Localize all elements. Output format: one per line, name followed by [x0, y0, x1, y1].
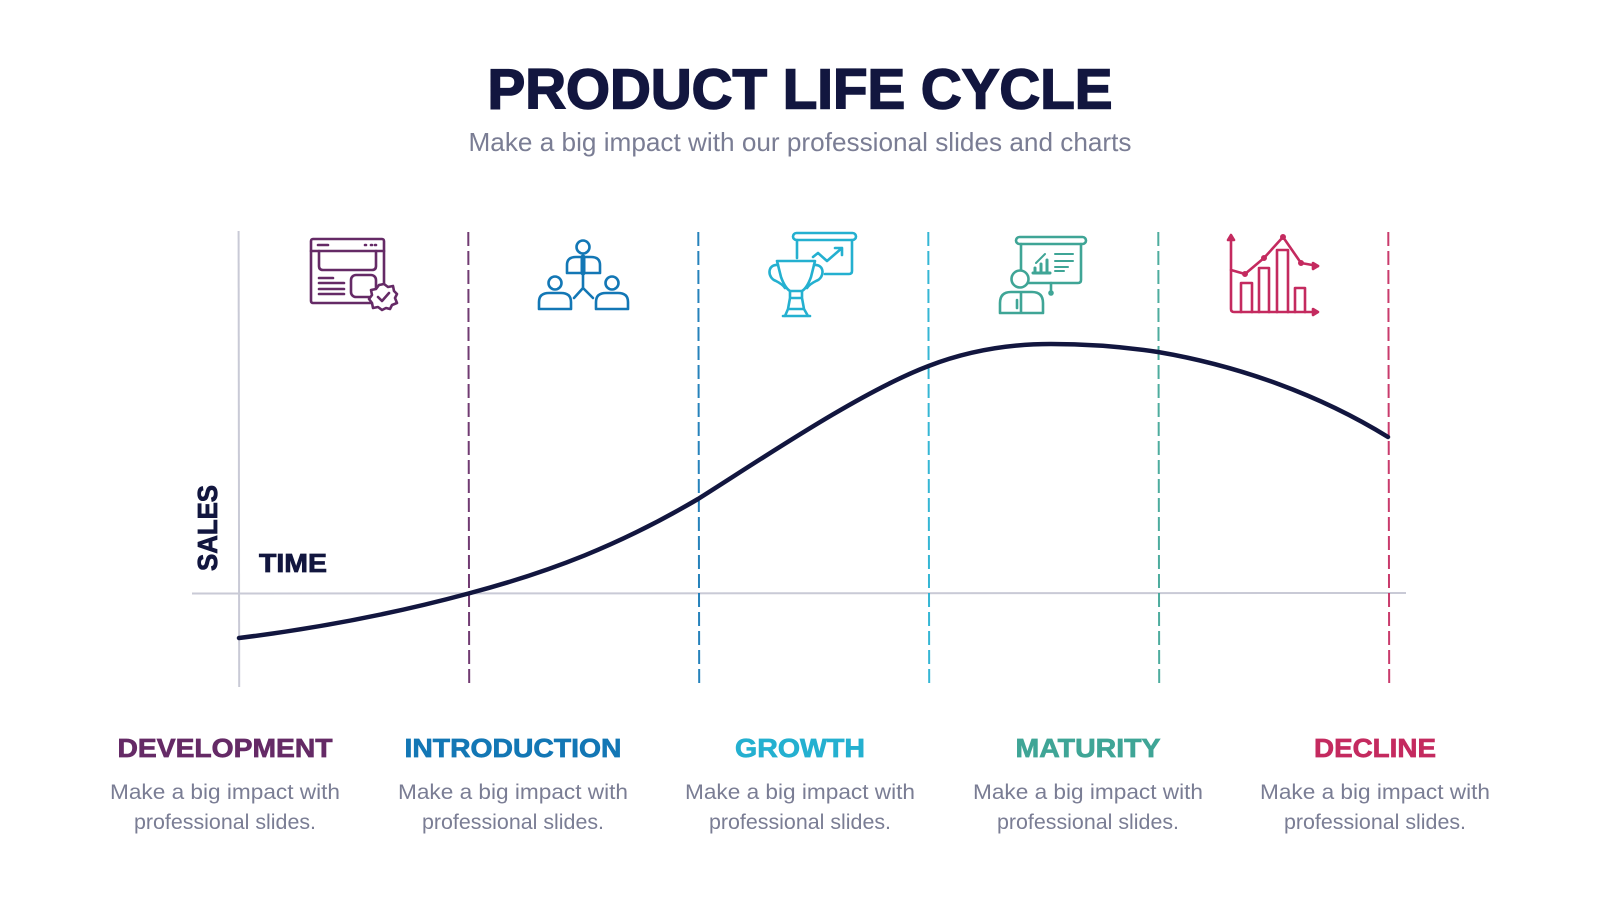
- subtitle: Make a big impact with our professional slides and charts: [468, 127, 1132, 157]
- description: maturity: professional slides.: [997, 811, 1179, 834]
- panel: decline: [1260, 733, 1490, 834]
- description: introduction: professional slides.: [422, 811, 604, 834]
- description: decline: professional slides.: [1284, 811, 1466, 834]
- description: development: Make a big impact with: [110, 781, 340, 804]
- description: decline: Make a big impact with: [1260, 781, 1490, 804]
- axis label: sales: SALES: [192, 485, 223, 571]
- panel: growth: [685, 733, 915, 834]
- icon: bar and line chart: [1228, 235, 1318, 315]
- heading: development: DEVELOPMENT: [118, 733, 333, 763]
- description: development: professional slides.: [134, 811, 316, 834]
- heading: growth: GROWTH: [735, 733, 865, 763]
- description: introduction: Make a big impact with: [398, 781, 628, 804]
- icon: team hierarchy: [539, 240, 628, 309]
- icon: trophy and presentation board: [769, 233, 856, 316]
- sales curve: [239, 344, 1388, 638]
- panel: maturity: [973, 733, 1203, 834]
- chart: product life cycle curve: [192, 231, 1406, 687]
- heading: decline: DECLINE: [1314, 733, 1436, 763]
- description: growth: professional slides.: [709, 811, 891, 834]
- axis label: time: TIME: [259, 548, 327, 578]
- icon: presenter with board: [1000, 237, 1086, 313]
- heading: introduction: INTRODUCTION: [404, 733, 622, 763]
- title: PRODUCT LIFE CYCLE: [488, 58, 1112, 122]
- description: maturity: Make a big impact with: [973, 781, 1203, 804]
- panel: introduction: [398, 733, 628, 834]
- description: growth: Make a big impact with: [685, 781, 915, 804]
- heading: maturity: MATURITY: [1016, 733, 1160, 763]
- panel: development: [110, 733, 340, 834]
- icon: web page with badge: [311, 239, 397, 310]
